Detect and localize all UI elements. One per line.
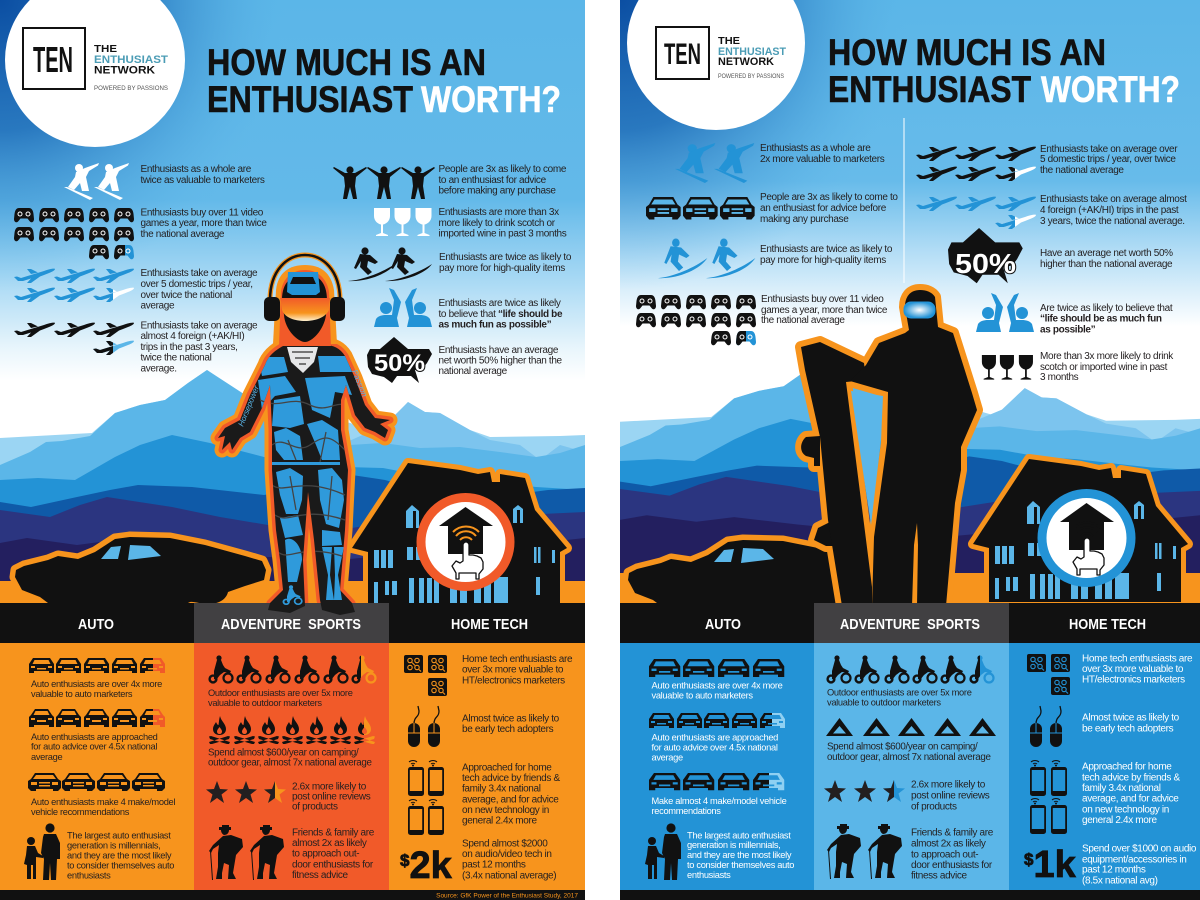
auto stat 1: Auto enthusiasts are over 4x more bbox=[652, 680, 783, 690]
category bar bbox=[0, 603, 585, 643]
stat: net worth: Enthusiasts have an average bbox=[438, 345, 559, 356]
stat: wine: Enthusiasts are more than 3x bbox=[438, 207, 559, 218]
tech stat 4 bbox=[1024, 844, 1197, 886]
tech stat 4: (8.5x national avg) bbox=[1082, 876, 1158, 886]
stat: high quality: pay more for high-quality items bbox=[760, 255, 886, 266]
head and helmet bbox=[264, 255, 345, 346]
sports stat 2: outdoor gear, almost 7x national average bbox=[208, 758, 372, 768]
tech stat 1: over 3x more valuable to bbox=[462, 664, 564, 676]
title: WORTH? bbox=[421, 79, 561, 120]
stat: domestic trips: 5 domestic trips / year, over twice bbox=[1040, 154, 1176, 165]
stat: foreign trips bbox=[14, 320, 258, 374]
stat: video games: games a year, more than twice bbox=[761, 305, 888, 316]
stat: wine: 3 months bbox=[1040, 372, 1079, 383]
sports stat 4 bbox=[827, 824, 994, 882]
rider silhouette bbox=[850, 290, 977, 606]
tech stat 4: 1k bbox=[1033, 844, 1077, 886]
auto stat 1: Auto enthusiasts are over 4x more bbox=[31, 679, 162, 689]
stat: video games bbox=[636, 294, 888, 345]
auto stat 1 bbox=[29, 658, 165, 699]
stat: video games: the national average bbox=[140, 229, 225, 240]
auto stat 3: Make almost 4 make/model vehicle bbox=[652, 796, 787, 806]
stat: life should be fun: Enthusiasts are twice as likely bbox=[438, 298, 561, 309]
auto stat 2: Auto enthusiasts are approached bbox=[652, 732, 778, 742]
logo circle: NETWORK bbox=[94, 64, 155, 76]
stat: net worth: 50% bbox=[955, 248, 1016, 279]
tech stat 3: family 3.4x national bbox=[1082, 783, 1161, 794]
stat: wine bbox=[982, 351, 1174, 383]
tech stat 3: Approached for home bbox=[462, 762, 552, 774]
stat: high quality: Enthusiasts are twice as likely to bbox=[760, 244, 893, 255]
stat: video games bbox=[14, 208, 267, 259]
auto stat 3 bbox=[649, 773, 787, 816]
stat: advice: before making any purchase bbox=[438, 186, 556, 196]
tech stat 4: on audio/video tech in bbox=[462, 849, 552, 860]
snowboarder figure bbox=[801, 290, 977, 606]
stat: domestic trips: the national average bbox=[1040, 165, 1124, 176]
bindings bbox=[801, 436, 836, 546]
auto stat 4: to consider themselves auto bbox=[687, 860, 794, 870]
category bar: AUTO bbox=[705, 616, 741, 633]
gap between board and rider bbox=[851, 391, 883, 525]
category bar: HOME TECH bbox=[451, 616, 528, 633]
house silhouette bbox=[973, 459, 1188, 602]
tech stat 3: on new technology in bbox=[1082, 804, 1169, 816]
panel: right infographic with snowboarder figure bbox=[620, 0, 1200, 900]
sports stat 3 bbox=[206, 781, 371, 812]
sports stat 4: door enthusiasts for bbox=[911, 860, 993, 871]
stat: advice: People are 3x as likely to come bbox=[438, 164, 567, 175]
stat: foreign trips: twice the national bbox=[140, 352, 212, 364]
tech stat 3: tech advice by friends & bbox=[1082, 772, 1180, 784]
stat: 2x valuable bbox=[675, 143, 885, 183]
stat: high quality: pay more for high-quality items bbox=[439, 263, 565, 274]
tech stat 4: past 12 months bbox=[1082, 864, 1146, 876]
stat: wine: more likely to drink scotch or bbox=[438, 218, 556, 229]
stat: advice: to an enthusiast for advice bbox=[438, 175, 547, 186]
house silhouette bbox=[352, 463, 567, 606]
logo circle: THE bbox=[718, 36, 740, 47]
logo circle bbox=[5, 0, 185, 147]
sports stat 2 bbox=[208, 716, 375, 768]
auto stat 4: and they are the most likely bbox=[67, 850, 172, 860]
auto stat 4: to consider themselves auto bbox=[67, 860, 174, 870]
tech stat 2: be early tech adopters bbox=[1082, 724, 1174, 734]
tech stat 1: Home tech enthusiasts are bbox=[462, 654, 573, 665]
footer with source bbox=[0, 890, 585, 900]
sports stat 4: to approach out- bbox=[292, 848, 359, 860]
stat: life should be fun: “life should be as much fun bbox=[1040, 314, 1162, 324]
tech stat 3 bbox=[1030, 760, 1180, 834]
stat: domestic trips bbox=[916, 144, 1178, 181]
auto stat 3: Auto enthusiasts make 4 make/model bbox=[31, 797, 175, 807]
logo circle: ENTHUSIAST bbox=[94, 54, 168, 66]
tech stat 4: $ bbox=[1024, 850, 1034, 869]
stat: advice: making any purchase bbox=[760, 214, 849, 225]
sports stat 1 bbox=[827, 655, 994, 708]
stat: foreign trips: Enthusiasts take on average bbox=[140, 320, 258, 332]
tech stat 2: be early tech adopters bbox=[462, 724, 554, 735]
tech stat 4: Spend over $1000 on audio bbox=[1082, 844, 1197, 854]
mountain range bbox=[0, 370, 585, 660]
logo circle: NETWORK bbox=[718, 56, 774, 68]
panel: auto column bbox=[620, 643, 814, 890]
title: HOW MUCH IS AN bbox=[207, 42, 486, 83]
auto stat 3: vehicle recommendations bbox=[31, 807, 130, 817]
tech stat 1: over 3x more valuable to bbox=[1082, 664, 1184, 675]
robot figure bbox=[218, 255, 390, 615]
tech stat 4: past 12 months bbox=[462, 860, 526, 870]
sports stat 1: valuable to outdoor marketers bbox=[208, 698, 322, 708]
stat: domestic trips: Enthusiasts take on average over bbox=[1040, 144, 1178, 155]
stat: advice: People are 3x as likely to come to bbox=[760, 192, 898, 203]
auto stat 2: average bbox=[652, 752, 683, 762]
panel: home tech column bbox=[389, 643, 585, 890]
stat: video games: games a year, more than twice bbox=[140, 218, 267, 229]
tech stat 2 bbox=[408, 706, 560, 747]
stat: life should be fun: as much fun as possible” bbox=[438, 320, 552, 330]
auto stat 2: for auto advice over 4.5x national bbox=[31, 742, 157, 752]
stat: video games: Enthusiasts buy over 11 video bbox=[140, 208, 264, 218]
auto stat 2: average bbox=[31, 752, 63, 762]
stat: life should be fun bbox=[976, 293, 1173, 336]
panel: adventure sports column bbox=[814, 643, 1009, 890]
footer with source: Source: GfK Power of the Enthusiast Study, 2017 bbox=[436, 892, 578, 900]
stat: net worth bbox=[367, 337, 563, 383]
stat: foreign trips: average. bbox=[140, 364, 177, 374]
logo circle bbox=[627, 0, 805, 130]
tech stat 3: general 2.4x more bbox=[462, 816, 537, 826]
panel: adventure sports column bbox=[194, 643, 389, 890]
title bbox=[207, 42, 561, 120]
stat: high quality bbox=[348, 247, 572, 281]
stat: foreign trips: 4 foreign (+AK/HI) trips in the past bbox=[1040, 205, 1179, 216]
tech stat 1 bbox=[1027, 654, 1193, 695]
stat: domestic trips: average bbox=[140, 300, 175, 312]
stat: foreign trips bbox=[916, 194, 1187, 229]
logo circle: TEN bbox=[33, 39, 73, 80]
sports stat 1: Outdoor enthusiasts are over 5x more bbox=[208, 688, 353, 698]
auto stat 4: enthusiasts bbox=[687, 870, 731, 880]
sports stat 4: fitness advice bbox=[292, 870, 348, 881]
category bar: AUTO bbox=[78, 616, 114, 633]
auto stat 1: valuable to auto marketers bbox=[652, 690, 753, 700]
title bbox=[828, 32, 1180, 110]
stat: net worth bbox=[948, 228, 1173, 283]
stat: life should be fun: Are twice as likely to believe that bbox=[1040, 303, 1173, 314]
tech stat 2: Almost twice as likely to bbox=[462, 714, 560, 724]
panel: auto column bbox=[0, 643, 194, 890]
tech stat 4: equipment/accessories in bbox=[1082, 854, 1186, 866]
logo circle: ENTHUSIAST bbox=[718, 46, 786, 58]
category bar bbox=[620, 603, 1200, 643]
tech stat 3: average, and for advice bbox=[462, 794, 559, 806]
stat: net worth: 50% bbox=[374, 350, 425, 377]
category bar: ADVENTURE SPORTS bbox=[840, 616, 980, 633]
sky background bbox=[620, 0, 1200, 604]
stat: domestic trips: over twice the national bbox=[140, 290, 232, 301]
stat: foreign trips: 3 years, twice the national average. bbox=[1040, 216, 1185, 227]
stat: net worth: net worth 50% higher than the bbox=[438, 356, 563, 366]
sports stat 2: Spend almost $600/year on camping/ bbox=[208, 748, 359, 758]
stat: wine: More than 3x more likely to drink bbox=[1040, 351, 1174, 362]
stat: domestic trips bbox=[14, 268, 258, 312]
mountain range bbox=[620, 358, 1200, 629]
tech stat 3: on new technology in bbox=[462, 805, 549, 816]
sports stat 4: Friends & family are bbox=[292, 828, 375, 838]
sports stat 2: Spend almost $600/year on camping/ bbox=[827, 742, 978, 752]
stat: life should be fun: as possible” bbox=[1040, 324, 1096, 336]
tech stat 3: family 3.4x national bbox=[462, 784, 541, 794]
sports stat 4: almost 2x as likely bbox=[292, 838, 367, 849]
panel: left infographic with robot figure bbox=[0, 0, 585, 900]
auto stat 4: generation is millennials, bbox=[67, 840, 160, 850]
auto stat 4: generation is millennials, bbox=[687, 840, 780, 850]
tech stat 4: 2k bbox=[409, 845, 453, 887]
ground bbox=[0, 581, 585, 605]
stat: domestic trips: Enthusiasts take on average bbox=[140, 268, 258, 279]
stat: twice as valuable: Enthusiasts as a whole are bbox=[140, 164, 252, 175]
snowboard bbox=[801, 342, 872, 606]
sports stat 4: fitness advice bbox=[911, 870, 967, 882]
stat: video games: Enthusiasts buy over 11 video bbox=[761, 294, 884, 305]
stat: advice: an enthusiast for advice before bbox=[760, 203, 887, 214]
sports stat 3: 2.6x more likely to bbox=[292, 782, 367, 792]
category bar: HOME TECH bbox=[1069, 616, 1146, 633]
stat: foreign trips: Enthusiasts take on average almost bbox=[1040, 194, 1187, 205]
stat: foreign trips: trips in the past 3 years, bbox=[140, 342, 238, 353]
stat: high quality bbox=[658, 238, 893, 278]
auto stat 1: valuable to auto marketers bbox=[31, 689, 133, 699]
tech stat 4 bbox=[400, 838, 556, 887]
category bar: ADVENTURE SPORTS bbox=[221, 616, 361, 633]
tech stat 2: Almost twice as likely to bbox=[1082, 712, 1180, 724]
center divider bbox=[904, 118, 905, 283]
sports stat 3: of products bbox=[911, 802, 957, 812]
robot figure: Horsepower bbox=[237, 384, 261, 428]
stat: advice bbox=[333, 164, 567, 199]
sports stat 2: outdoor gear, almost 7x national average bbox=[827, 752, 991, 763]
robot figure: Passion bbox=[350, 368, 369, 399]
car silhouette bbox=[15, 537, 266, 604]
stat: high quality: Enthusiasts are twice as likely to bbox=[439, 252, 572, 263]
stat: twice as valuable bbox=[64, 163, 265, 200]
stat: foreign trips: almost 4 foreign (+AK/HI) bbox=[140, 331, 244, 342]
auto stat 1 bbox=[649, 659, 784, 700]
tech stat 3 bbox=[408, 760, 560, 835]
logo circle: THE bbox=[94, 44, 117, 55]
tech stat 3: Approached for home bbox=[1082, 762, 1172, 772]
sports stat 3: of products bbox=[292, 802, 338, 812]
auto stat 4: The largest auto enthusiast bbox=[67, 830, 171, 840]
tech stat 1: HT/electronics marketers bbox=[1082, 674, 1185, 686]
orange outlines bbox=[801, 290, 977, 606]
tech stat 4: $ bbox=[400, 851, 410, 870]
tech stat 3: general 2.4x more bbox=[1082, 815, 1157, 826]
logo circle: TEN bbox=[664, 38, 701, 71]
tech stat 2 bbox=[1030, 706, 1180, 747]
sports stat 1: valuable to outdoor marketers bbox=[827, 698, 941, 708]
auto stat 4: and they are the most likely bbox=[687, 850, 792, 860]
stat: 2x valuable: Enthusiasts as a whole are bbox=[760, 143, 871, 154]
sports stat 3: post online reviews bbox=[292, 792, 371, 802]
tech stat 1: HT/electronics marketers bbox=[462, 676, 565, 686]
title: ENTHUSIAST bbox=[207, 79, 413, 120]
stat: net worth: Have an average net worth 50% bbox=[1040, 248, 1173, 259]
stat: life should be fun bbox=[374, 288, 563, 330]
sports stat 4: almost 2x as likely bbox=[911, 838, 986, 850]
auto stat 3 bbox=[28, 773, 175, 817]
stat: net worth: higher than the national average bbox=[1040, 259, 1173, 270]
sports stat 4 bbox=[209, 825, 375, 881]
title: ENTHUSIAST bbox=[828, 69, 1031, 110]
sports stat 4: door enthusiasts for bbox=[292, 860, 374, 870]
footer bar bbox=[620, 890, 1200, 900]
auto stat 2 bbox=[649, 713, 785, 762]
stat: advice bbox=[646, 192, 898, 225]
title: HOW MUCH IS AN bbox=[828, 32, 1106, 73]
ground bbox=[620, 573, 1200, 605]
stat: domestic trips: over 5 domestic trips / year, bbox=[140, 279, 253, 290]
auto stat 2: for auto advice over 4.5x national bbox=[652, 742, 778, 752]
sports stat 1 bbox=[208, 655, 376, 708]
stat: life should be fun: to believe that “life should be bbox=[438, 309, 562, 320]
sports stat 4: Friends & family are bbox=[911, 828, 994, 838]
logo circle: POWERED BY PASSIONS bbox=[718, 73, 785, 80]
tech stat 3: average, and for advice bbox=[1082, 794, 1179, 804]
sports stat 3 bbox=[824, 780, 990, 812]
sports stat 4: to approach out- bbox=[911, 850, 978, 860]
stat: net worth: national average bbox=[438, 366, 508, 377]
auto stat 4 bbox=[24, 823, 174, 880]
tech stat 1: Home tech enthusiasts are bbox=[1082, 654, 1193, 664]
panel: home tech column bbox=[1009, 643, 1200, 890]
auto stat 3: recommendations bbox=[652, 806, 721, 816]
tech stat 1 bbox=[404, 654, 573, 696]
sky background bbox=[0, 0, 585, 604]
auto stat 2 bbox=[29, 709, 165, 762]
stat: twice as valuable: twice as valuable to marketers bbox=[140, 175, 265, 186]
stat: 2x valuable: 2x more valuable to marketers bbox=[760, 154, 885, 165]
auto stat 4: enthusiasts bbox=[67, 870, 111, 880]
car silhouette bbox=[628, 540, 879, 607]
auto stat 2: Auto enthusiasts are approached bbox=[31, 732, 158, 742]
sports stat 3: 2.6x more likely to bbox=[911, 780, 986, 790]
stat: wine: imported wine in past 3 months bbox=[438, 228, 567, 240]
sports stat 1: Outdoor enthusiasts are over 5x more bbox=[827, 688, 972, 698]
stat: wine bbox=[374, 207, 567, 240]
logo circle: POWERED BY PASSIONS bbox=[94, 85, 169, 92]
auto stat 4: The largest auto enthusiast bbox=[687, 830, 791, 840]
stat: video games: the national average bbox=[761, 315, 845, 326]
title: WORTH? bbox=[1041, 69, 1180, 110]
tech stat 4: (3.4x national average) bbox=[462, 870, 556, 882]
sports stat 2 bbox=[826, 718, 996, 763]
stat: wine: scotch or imported wine in past bbox=[1040, 362, 1168, 373]
tech stat 3: tech advice by friends & bbox=[462, 773, 560, 784]
tech stat 4: Spend almost $2000 bbox=[462, 838, 548, 850]
auto stat 4 bbox=[645, 823, 794, 880]
sports stat 3: post online reviews bbox=[911, 790, 990, 802]
